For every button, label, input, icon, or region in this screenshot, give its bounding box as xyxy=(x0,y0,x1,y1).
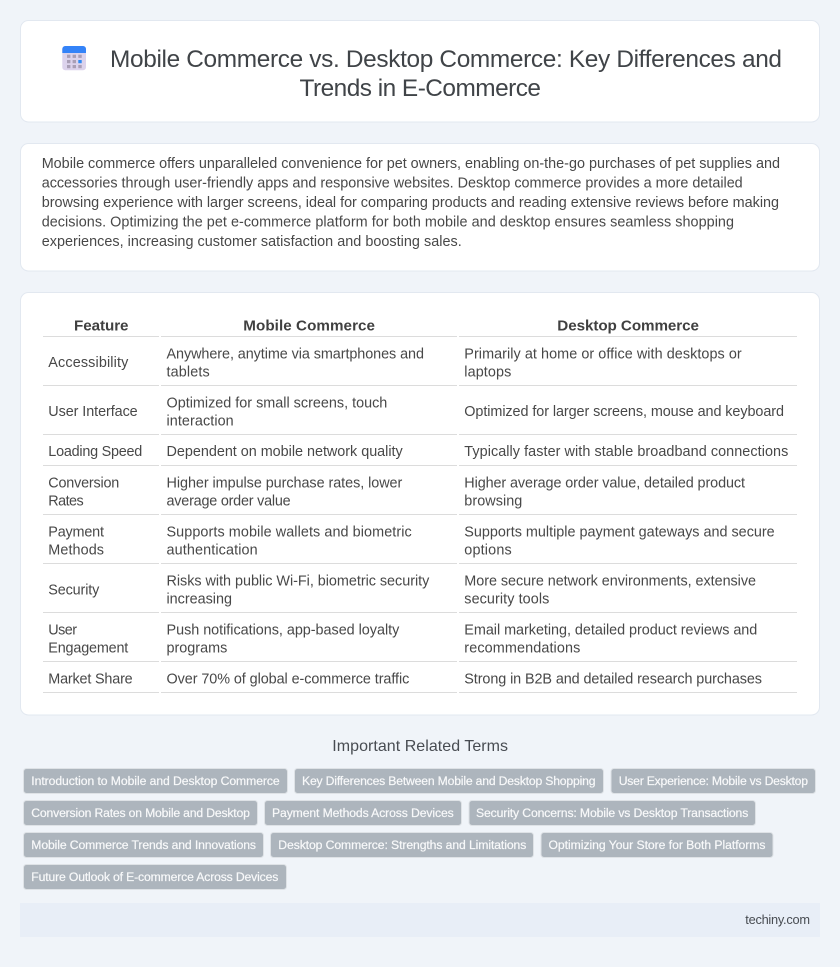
title: Trends in E-Commerce xyxy=(300,75,541,102)
row: accessibility: laptops xyxy=(464,364,511,380)
row: conversion rates: Conversion xyxy=(48,475,119,491)
table header: Desktop Commerce xyxy=(557,318,699,334)
row: user engagement xyxy=(48,622,757,656)
panel: introduction xyxy=(20,144,820,271)
tag xyxy=(541,832,773,858)
row: payment methods: options xyxy=(464,542,512,558)
row: user engagement: Push notifications, app-based loyalty xyxy=(166,622,400,638)
row: accessibility: Anywhere, anytime via smartphones and xyxy=(166,346,424,362)
tag xyxy=(24,768,288,794)
row: conversion rates: Higher impulse purchase rates, lower xyxy=(166,475,403,491)
title xyxy=(110,46,782,102)
row: user interface: interaction xyxy=(166,413,234,429)
heading: important related terms: Important Related Terms xyxy=(332,738,508,755)
row: user engagement: programs xyxy=(166,640,227,656)
tag: Introduction to Mobile and Desktop Commerce xyxy=(31,774,280,788)
tag xyxy=(469,800,756,826)
row: loading speed: Loading Speed xyxy=(48,444,142,460)
panel: comparison table xyxy=(20,292,820,715)
tag: Optimizing Your Store for Both Platforms xyxy=(548,838,766,852)
row: conversion rates xyxy=(48,475,745,509)
intro text block: browsing experience with larger screens, ideal for comparing products and reading extensive reviews before making xyxy=(42,195,779,211)
tag xyxy=(270,832,534,858)
footer xyxy=(20,903,820,937)
row: accessibility: Primarily at home or office with desktops or xyxy=(464,346,742,362)
intro text block: experiences, increasing customer satisfaction and boosting sales. xyxy=(42,234,462,250)
row: loading speed xyxy=(48,444,788,460)
row: conversion rates: Rates xyxy=(48,493,84,509)
row: security: Security xyxy=(48,582,100,598)
row: conversion rates: average order value xyxy=(166,493,291,509)
row: market share: Market Share xyxy=(48,671,133,687)
row: conversion rates: Higher average order value, detailed product xyxy=(464,475,745,491)
table header xyxy=(74,318,699,334)
row: accessibility xyxy=(48,346,742,380)
icon: calendar xyxy=(62,46,86,70)
row: user engagement: Email marketing, detailed product reviews and xyxy=(464,622,757,638)
row: security: security tools xyxy=(464,591,549,607)
row: market share: Strong in B2B and detailed research purchases xyxy=(464,671,762,687)
row: payment methods: Payment xyxy=(48,524,104,540)
intro text block: Mobile commerce offers unparalleled convenience for pet owners, enabling on-the-go purchases of pet supplies and xyxy=(42,156,780,172)
panel: header xyxy=(20,20,820,122)
table header: Feature xyxy=(74,318,128,334)
row: accessibility: Accessibility xyxy=(48,355,129,371)
tag: Key Differences Between Mobile and Desktop Shopping xyxy=(302,774,596,788)
tag: Payment Methods Across Devices xyxy=(272,806,454,820)
row: user interface: User Interface xyxy=(48,404,138,420)
intro text block: decisions. Optimizing the pet e-commerce platform for both mobile and desktop ensures seamless shopping xyxy=(42,214,734,230)
row: payment methods: Supports mobile wallets and biometric xyxy=(166,524,412,540)
tag: Conversion Rates on Mobile and Desktop xyxy=(31,806,250,820)
title: Mobile Commerce vs. Desktop Commerce: Key Differences and xyxy=(110,46,782,73)
footer credit: techiny.com xyxy=(745,912,810,927)
row: user engagement: Engagement xyxy=(48,640,128,656)
row: payment methods: Supports multiple payment gateways and secure xyxy=(464,524,775,540)
tag xyxy=(264,800,462,826)
row: payment methods: authentication xyxy=(166,542,258,558)
row: user engagement: User xyxy=(48,622,77,638)
tag xyxy=(611,768,816,794)
row: user engagement: recommendations xyxy=(464,640,580,656)
row: user interface: Optimized for larger screens, mouse and keyboard xyxy=(464,404,784,420)
tag xyxy=(24,864,286,890)
row: security xyxy=(48,573,756,607)
row: security: More secure network environments, extensive xyxy=(464,573,756,589)
tag: Security Concerns: Mobile vs Desktop Transactions xyxy=(476,806,748,820)
tag: Desktop Commerce: Strengths and Limitations xyxy=(278,838,526,852)
row: loading speed: Dependent on mobile network quality xyxy=(166,444,403,460)
intro text block: accessories through user-friendly apps and responsive websites. Desktop commerce provides a more detailed xyxy=(42,176,743,192)
tag xyxy=(294,768,604,794)
row: security: increasing xyxy=(166,591,232,607)
tag xyxy=(24,800,258,826)
row: market share xyxy=(48,671,762,687)
row: user interface: Optimized for small screens, touch xyxy=(166,395,387,411)
tag: Mobile Commerce Trends and Innovations xyxy=(31,838,256,852)
table header: Mobile Commerce xyxy=(243,318,375,334)
row: security: Risks with public Wi-Fi, biometric security xyxy=(166,573,430,589)
tag: Future Outlook of E-commerce Across Devices xyxy=(31,870,278,884)
row: user interface xyxy=(48,395,784,429)
row: payment methods: Methods xyxy=(48,542,104,558)
row: accessibility: tablets xyxy=(166,364,210,380)
row: conversion rates: browsing xyxy=(464,493,522,509)
row: payment methods xyxy=(48,524,775,558)
tag xyxy=(24,832,264,858)
intro text block xyxy=(42,156,780,250)
tag: User Experience: Mobile vs Desktop xyxy=(619,774,808,788)
related terms tags xyxy=(24,768,816,890)
row: loading speed: Typically faster with stable broadband connections xyxy=(464,444,788,460)
row: market share: Over 70% of global e-commerce traffic xyxy=(166,671,409,687)
